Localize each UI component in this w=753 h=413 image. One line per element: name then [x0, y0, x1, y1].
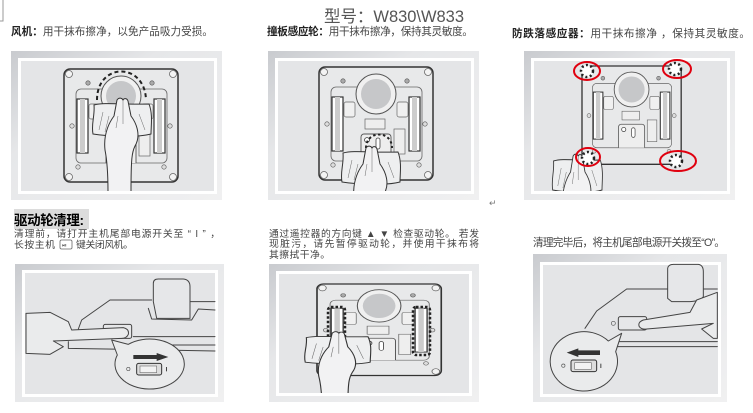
step 2: check drive wheels	[269, 227, 479, 412]
bumper caption: 撞板感应轮：用干抹布擦净，保持其灵敏度。	[267, 25, 473, 38]
device back with fan	[64, 69, 178, 182]
device back	[319, 67, 433, 180]
switch in callout	[137, 363, 162, 375]
zoom callout	[550, 332, 622, 391]
fan caption: 风机：用干抹布擦净，以免产品吸力受损。	[11, 25, 213, 38]
rear switch	[618, 317, 647, 330]
dashed bumper outline	[366, 134, 392, 148]
panel: fan cleaning	[11, 25, 222, 200]
sensor illustration frame	[524, 51, 735, 200]
right arrow	[133, 353, 168, 361]
hand with cloth over fan	[92, 98, 152, 192]
sensor dots	[581, 63, 682, 167]
zoom callout	[112, 339, 184, 389]
panel: bumper wheel cleaning	[267, 26, 479, 200]
step 1 illustration frame	[15, 264, 224, 402]
bumper illustration frame	[268, 51, 479, 200]
stray frame corner	[0, 0, 3, 21]
heading: drive wheel cleaning: 驱动轮清理:	[14, 212, 84, 228]
device body	[68, 300, 215, 351]
step 1 caption: 长按主机	[14, 238, 55, 251]
step 2 caption: 其擦拭干净。	[269, 248, 330, 261]
device body	[585, 289, 717, 347]
rear switch	[103, 324, 132, 338]
step 1 caption: 键关闭风机。	[76, 238, 133, 251]
switch in callout	[571, 360, 597, 372]
device back	[582, 66, 681, 164]
dashed wheel outlines	[328, 307, 430, 355]
title: 型号：W830\W833	[324, 7, 464, 26]
finger moving switch	[639, 292, 717, 338]
dock handle	[153, 279, 190, 318]
left arrow	[567, 348, 600, 357]
dashed fan outline	[97, 72, 146, 100]
step 3: switch off	[533, 236, 727, 402]
step 3 illustration frame	[533, 254, 727, 402]
hand with cloth at corner	[552, 154, 603, 191]
step 2 caption	[269, 227, 479, 261]
step 3 caption: 清理完毕后，将主机尾部电源开关拨至“O”。	[533, 236, 725, 249]
step 1 device, hand and callout	[26, 279, 215, 389]
device back	[317, 284, 441, 376]
return mark: ↵	[489, 198, 497, 208]
step 1 caption	[14, 227, 220, 251]
sensor caption: 防跌落感应器：用干抹布擦净 ，保持其灵敏度。	[512, 27, 750, 40]
step 1: switch on	[14, 227, 224, 402]
fan illustration frame	[11, 51, 222, 200]
step 2 caption: 现脏污，请先暂停驱动轮，并使用干抹布将	[269, 237, 479, 250]
step 1 caption: 清理前，请打开主机尾部电源开关至 “ I ” ，	[14, 227, 220, 240]
step 3 device, hand and callout	[550, 264, 717, 391]
hand with cloth at bumper	[341, 146, 401, 191]
red sensor highlights	[574, 60, 696, 171]
step 2 caption: 通过遥控器的方向键 ▲ ▼ 检查驱动轮。 若发	[269, 227, 479, 240]
dock handle	[668, 264, 703, 302]
finger pressing switch	[26, 312, 128, 354]
step 1 caption: ⏯	[62, 243, 67, 249]
hand with cloth over left wheel	[304, 331, 372, 393]
step 2 illustration frame	[269, 264, 479, 402]
panel: anti-fall sensors	[512, 28, 743, 200]
